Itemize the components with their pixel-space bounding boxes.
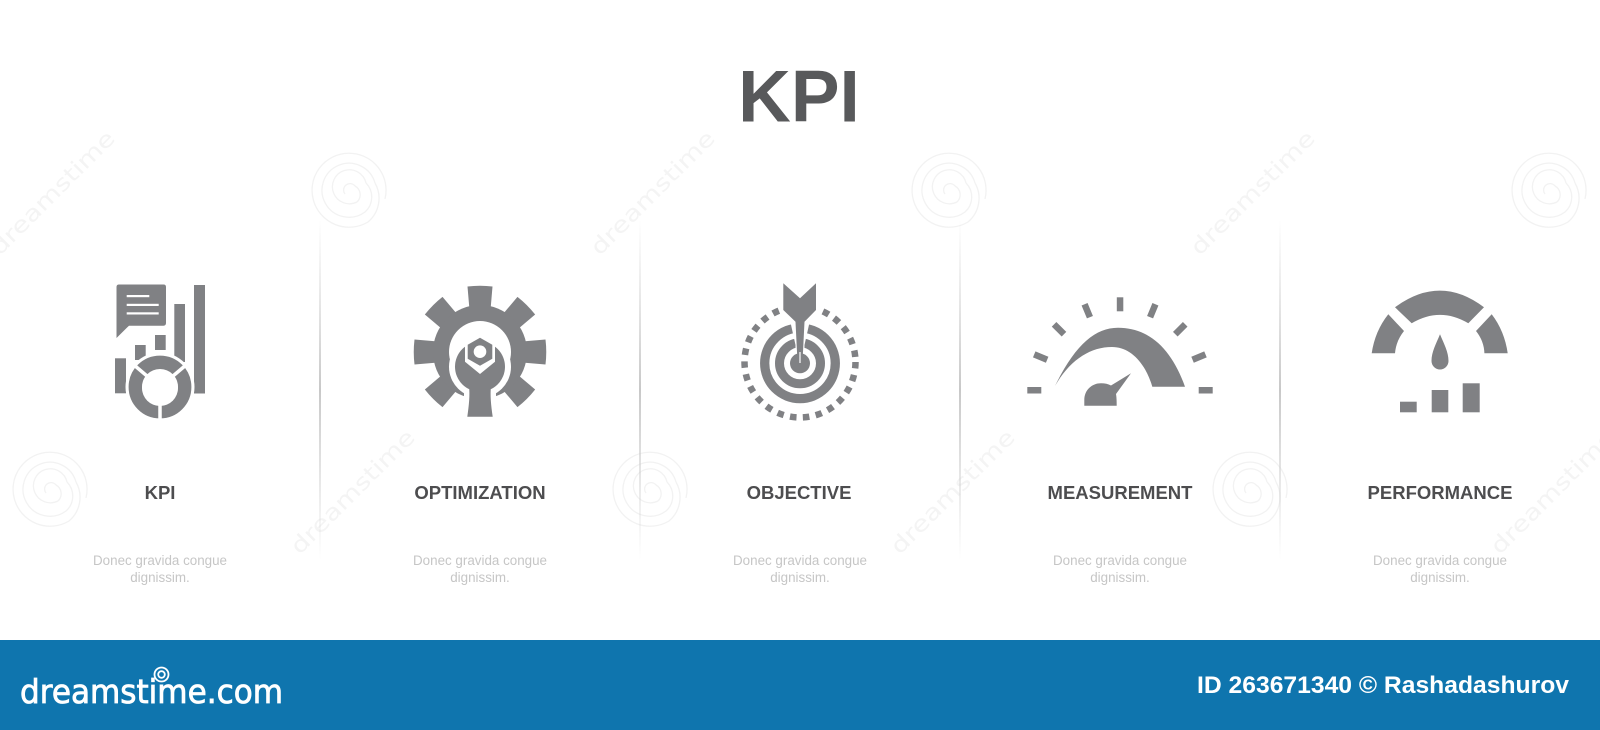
label: OBJECTIVE — [747, 482, 851, 503]
background watermarks — [0, 126, 1600, 560]
icon: logo spiral — [154, 668, 168, 682]
description: dignissim. — [770, 570, 830, 585]
icon: gear with wrench and nut — [414, 286, 546, 417]
image credit: ID 263671340 © Rashadashurov — [1197, 672, 1570, 699]
panel: KPI — [93, 284, 227, 585]
icon: gauge with drop and bars — [1372, 291, 1508, 412]
background watermarks: dreamstime — [586, 126, 721, 261]
footer bar — [0, 640, 1600, 730]
icon: speedometer gauge — [1027, 297, 1213, 406]
description: Donec gravida congue — [1373, 553, 1507, 568]
background watermarks: dreamstime — [886, 425, 1021, 560]
label: PERFORMANCE — [1368, 482, 1512, 503]
label: MEASUREMENT — [1048, 482, 1193, 503]
label: KPI — [145, 482, 175, 503]
description: dignissim. — [130, 570, 190, 585]
panel: optimization — [413, 286, 547, 585]
description: Donec gravida congue — [733, 553, 867, 568]
description: dignissim. — [1090, 570, 1150, 585]
panel: measurement — [1027, 297, 1213, 585]
title: KPI — [738, 57, 860, 138]
description: dignissim. — [450, 570, 510, 585]
description: Donec gravida congue — [1053, 553, 1187, 568]
background watermarks: dreamstime — [1486, 425, 1600, 560]
label: OPTIMIZATION — [414, 482, 546, 503]
background watermarks: dreamstime — [1186, 126, 1321, 261]
icon: chart with speech bubble and donut — [115, 284, 205, 422]
description: Donec gravida congue — [413, 553, 547, 568]
panel: performance — [1368, 291, 1512, 585]
dividers — [319, 220, 1281, 560]
panel: objective — [733, 281, 867, 585]
description: Donec gravida congue — [93, 553, 227, 568]
logo wordmark: dreamstime.com — [20, 672, 283, 711]
description: dignissim. — [1410, 570, 1470, 585]
icon: target with arrow — [744, 281, 856, 418]
background watermarks: dreamstime — [286, 425, 421, 560]
